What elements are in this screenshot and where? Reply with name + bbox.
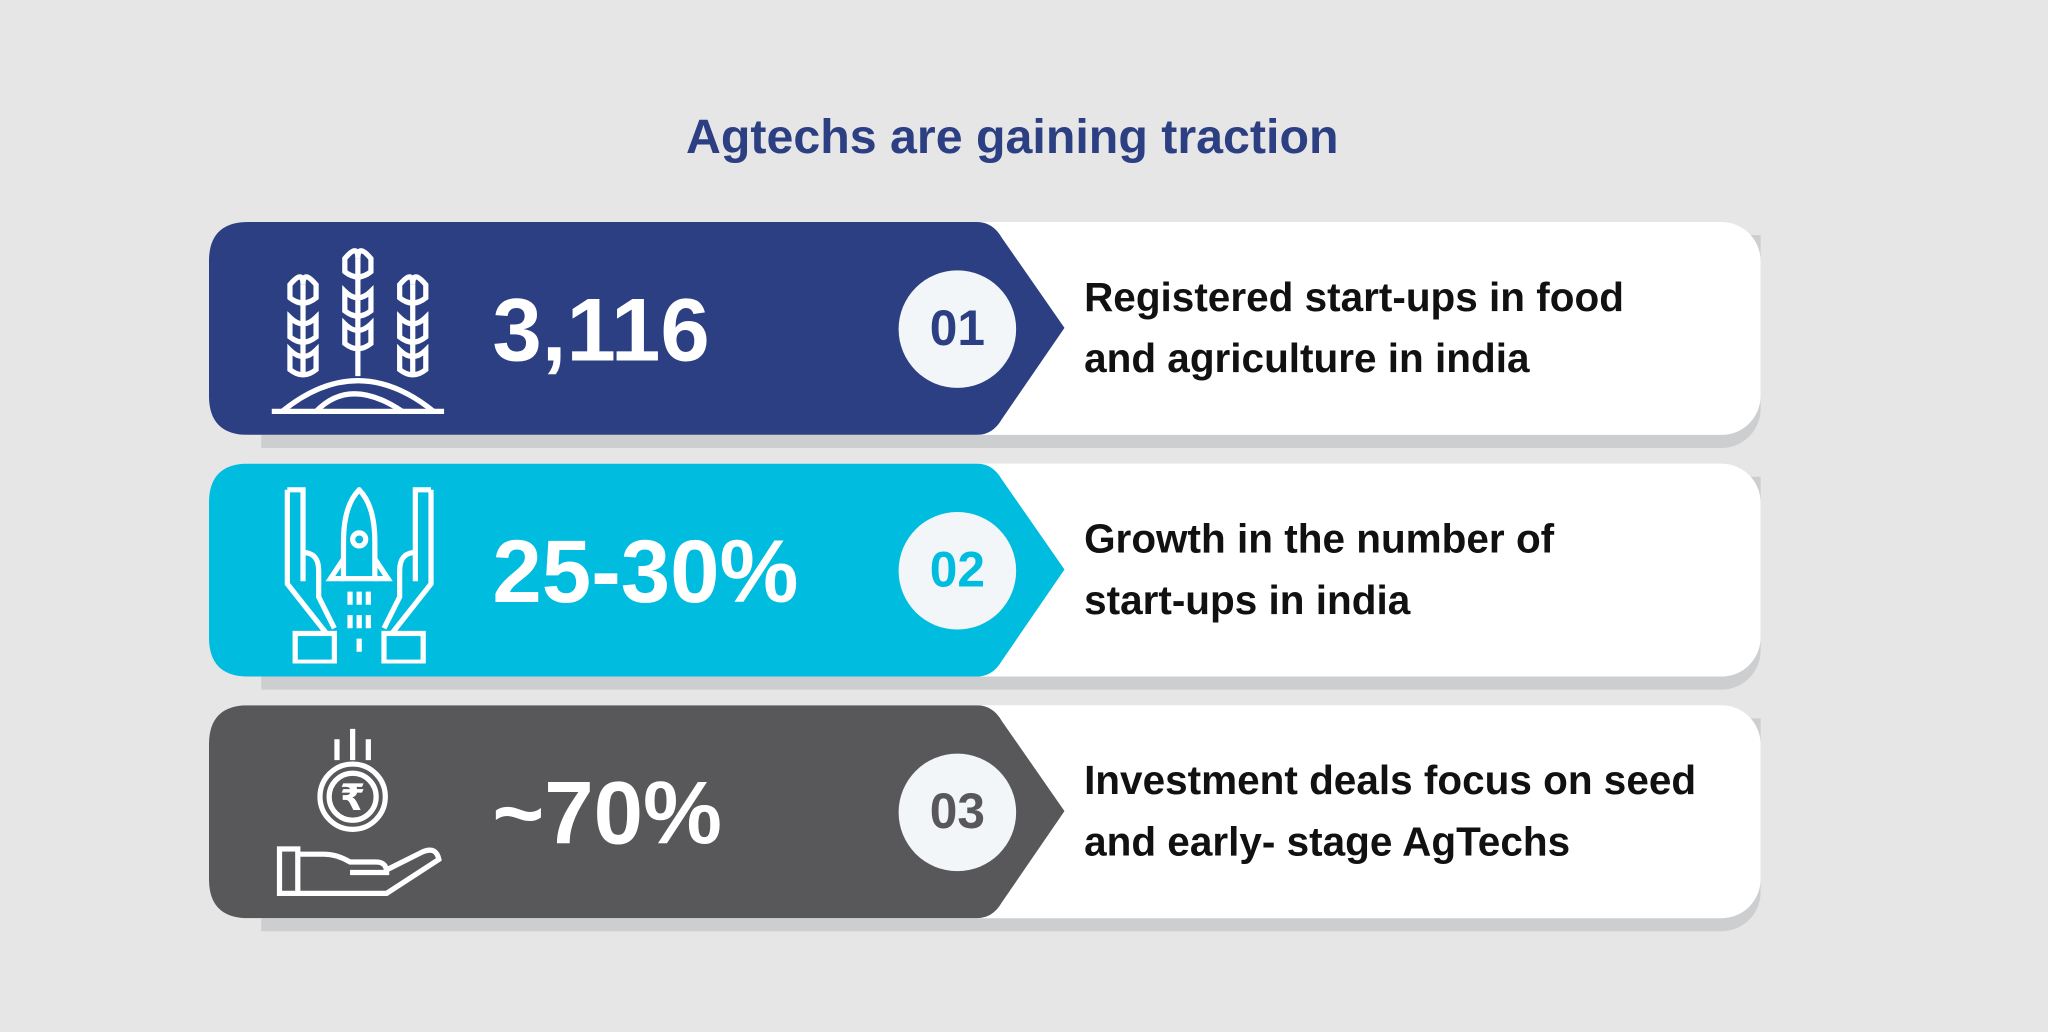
colored panel 2: [209, 464, 1064, 676]
colored panel 1: [209, 222, 1064, 435]
number 1: 3,116: [492, 281, 710, 380]
text 2: Growth in the number of: [1084, 516, 1554, 562]
text 3: [1084, 758, 1696, 865]
text 1: [1084, 274, 1624, 381]
badge 02: [899, 512, 1016, 630]
text 2: [1084, 516, 1554, 623]
icon: hands with rocket: [284, 487, 434, 664]
badge 01: [899, 270, 1016, 388]
icon: rupee coin in hand: [276, 728, 442, 896]
number 2: 25-30%: [492, 522, 799, 622]
text 1: and agriculture in india: [1084, 336, 1530, 381]
text 1: Registered start-ups in food: [1084, 274, 1624, 320]
text 3: and early- stage AgTechs: [1084, 819, 1570, 865]
number 3: ~70%: [492, 764, 722, 863]
row 1: [209, 222, 1760, 448]
text 2: start-ups in india: [1084, 577, 1410, 623]
badge 01: 01: [930, 302, 985, 357]
row 2: [209, 464, 1760, 690]
title: Agtechs are gaining traction: [686, 110, 1338, 163]
badge 02: 02: [930, 543, 985, 598]
row 3: [209, 705, 1760, 932]
text 3: Investment deals focus on seed: [1084, 758, 1696, 803]
badge 03: 03: [930, 785, 985, 840]
badge 03: [899, 754, 1016, 871]
colored panel 3: [209, 705, 1064, 918]
icon: rupee coin in hand: ₹: [340, 776, 365, 819]
icon: plants: [272, 248, 444, 414]
